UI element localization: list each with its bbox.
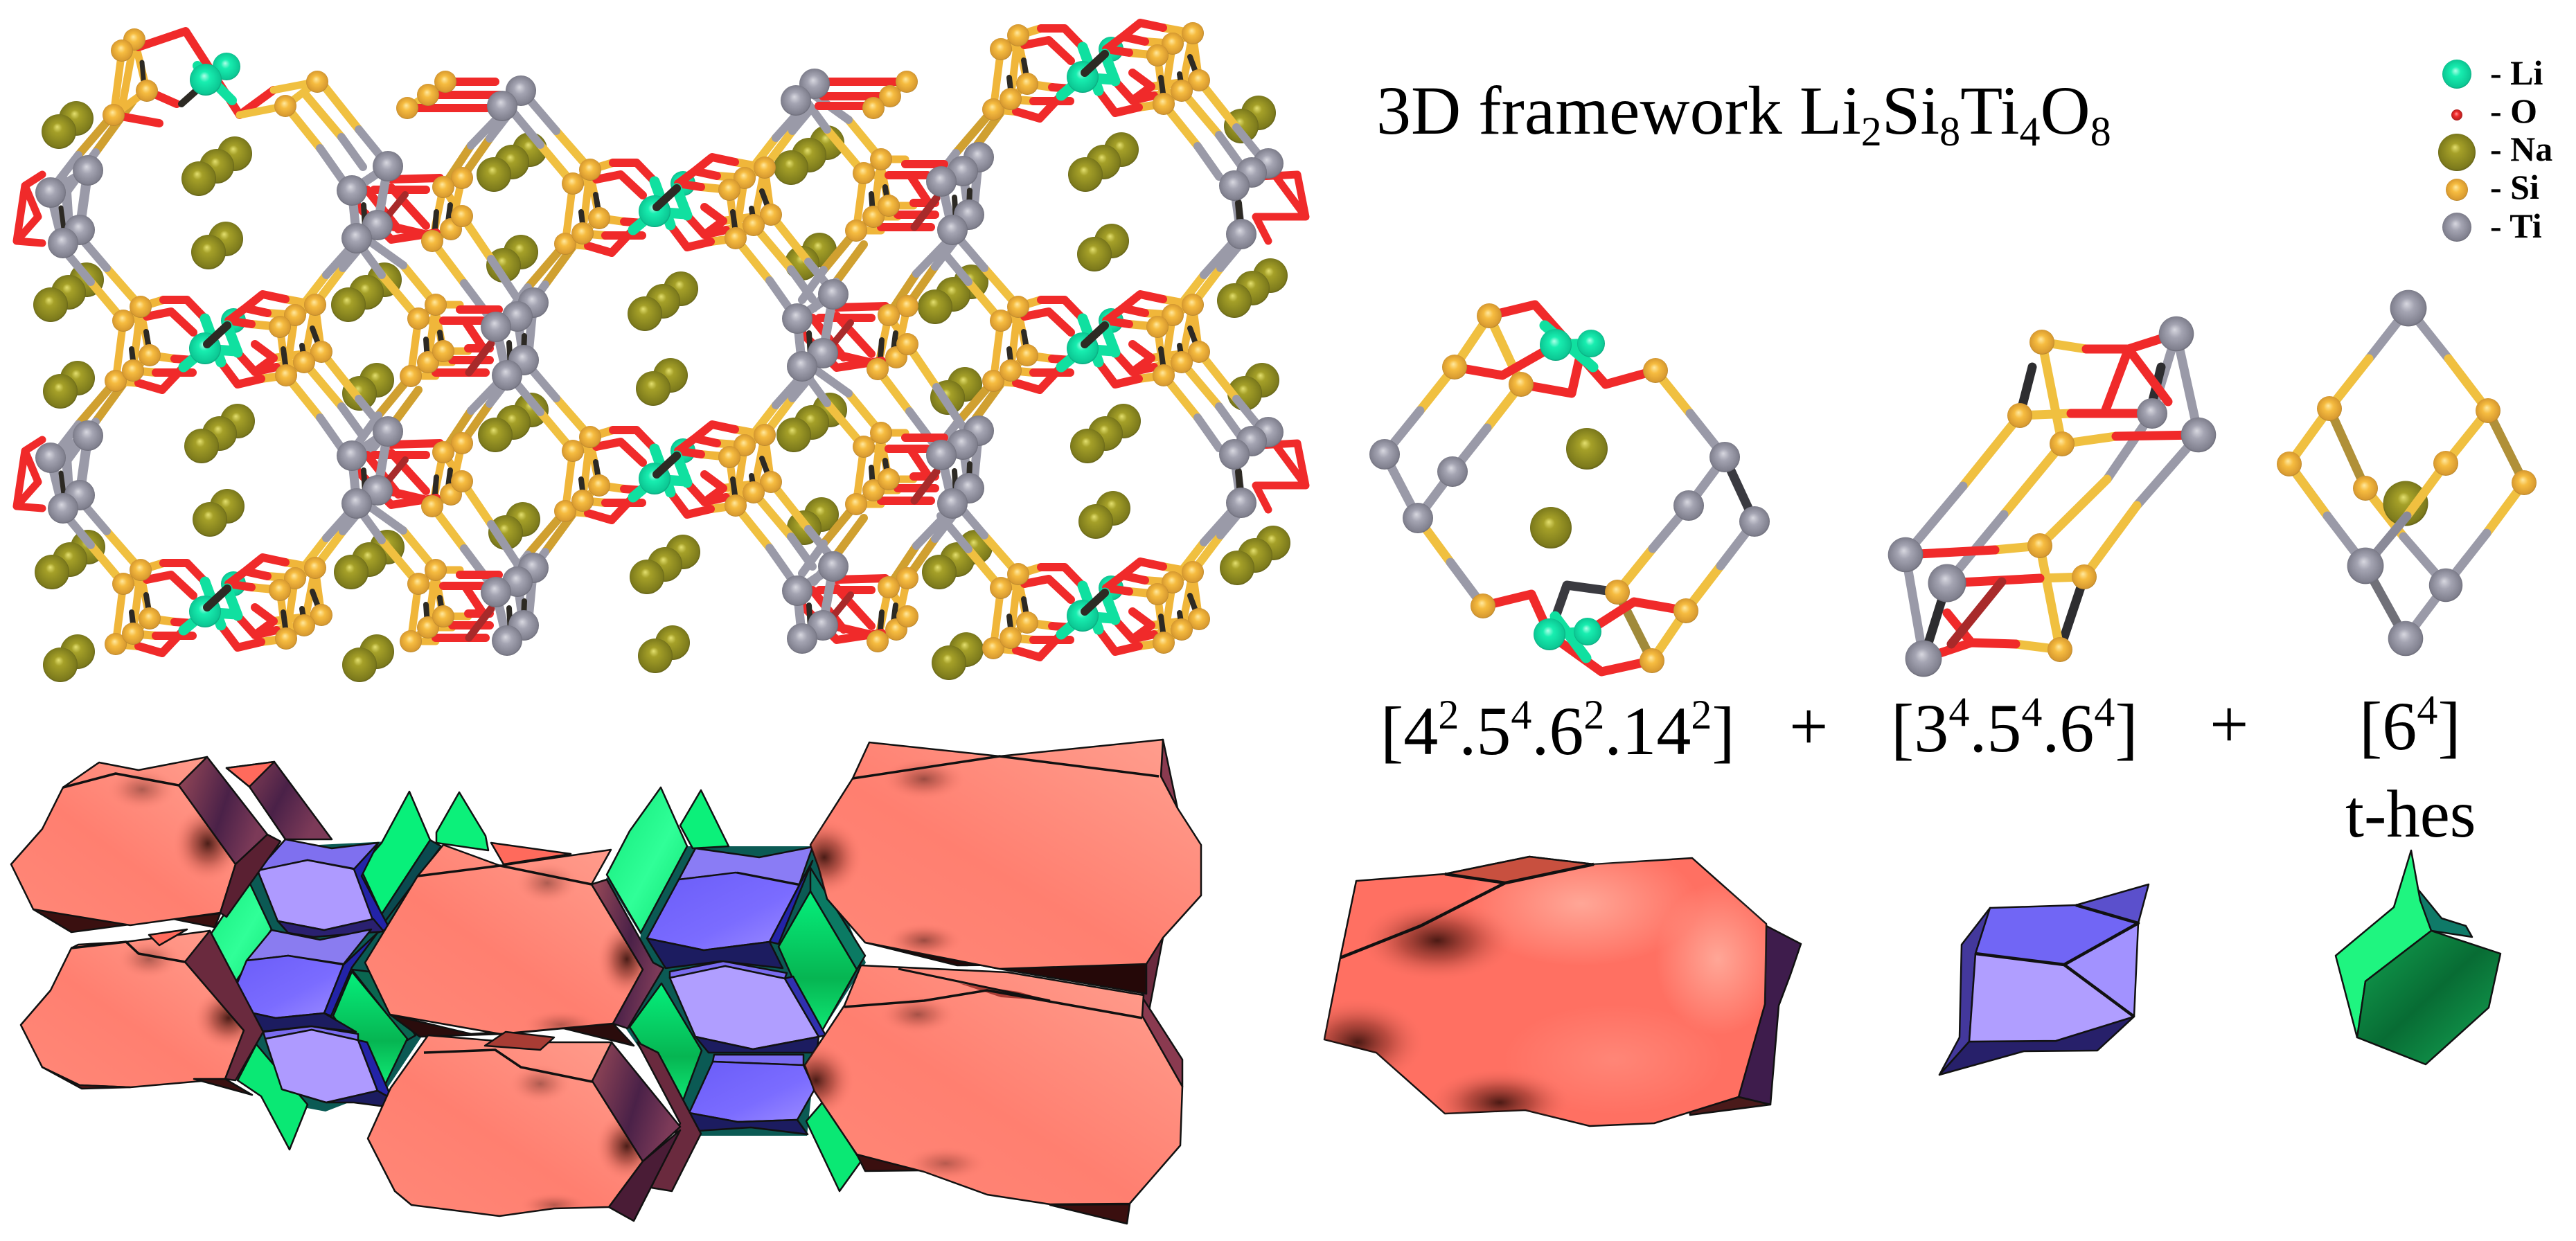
- formula label 1: 2: [1438, 692, 1459, 738]
- red cage upper right: [809, 738, 1202, 1008]
- formula label 1: ]: [1712, 693, 1735, 769]
- formula label 2: 4: [2094, 689, 2115, 735]
- plus sign 2: +: [2210, 686, 2248, 762]
- net label t-hes: t-hes: [2345, 777, 2476, 851]
- legend item: Na: [2438, 130, 2552, 171]
- top partial titanium nodes: [396, 69, 918, 121]
- polyhedron: blue [3^4.5^4.6^4]: [1939, 884, 2149, 1075]
- red cage lower centre: [368, 1032, 701, 1221]
- formula label 1: .6: [1531, 693, 1583, 769]
- title: Si: [1882, 72, 1939, 149]
- legend item: Si: [2446, 168, 2539, 206]
- panel: crystal framework ball-and-stick structure: [17, 22, 1306, 682]
- formula label 1: 4: [1511, 692, 1531, 738]
- plus sign 1: +: [1789, 688, 1828, 765]
- formula label 1: 2: [1583, 692, 1604, 738]
- formula label 3: ]: [2437, 688, 2461, 765]
- formula label 2: 4: [2021, 689, 2042, 735]
- title: Ti: [1960, 72, 2020, 149]
- sodium atoms: [33, 96, 1290, 682]
- formula label 2: ]: [2115, 690, 2138, 767]
- title: 8: [2090, 109, 2111, 154]
- formula label 3: [6: [2359, 688, 2417, 765]
- polyhedron: green [6^4] t-hes: [2336, 850, 2501, 1064]
- legend item: Ti: - Ti: [2490, 206, 2542, 245]
- cage 3: ball-and-stick [6^4]: [2277, 290, 2537, 656]
- red cage lower right: [778, 965, 1182, 1224]
- legend: [2438, 53, 2552, 245]
- legend item: Li: - Li: [2490, 53, 2543, 92]
- green tiles: [196, 787, 865, 1191]
- formula label 2: [3: [1891, 690, 1948, 767]
- formula label 3: 4: [2417, 687, 2437, 733]
- formula label 2: 4: [1948, 689, 1969, 735]
- formula label 1: .14: [1604, 693, 1691, 769]
- backing between tiles: [196, 841, 866, 1136]
- legend item: O: [2451, 91, 2537, 130]
- legend item: Si: - Si: [2490, 168, 2539, 206]
- titanium nodes: [17, 142, 1306, 656]
- formula label 1: .5: [1459, 693, 1511, 769]
- formula label 1: 2: [1691, 692, 1712, 738]
- title: O: [2041, 72, 2090, 149]
- legend item: Na: - Na: [2490, 130, 2552, 168]
- formula label 2: .5: [1969, 690, 2021, 767]
- title: 4: [2020, 109, 2041, 154]
- title: 2: [1861, 109, 1882, 154]
- cage 1: ball-and-stick [4^2.5^4.6^2.14^2]: [1369, 303, 1770, 673]
- red cage upper left: [11, 757, 332, 932]
- title: 8: [1939, 109, 1960, 154]
- formula label 2: .6: [2042, 690, 2094, 767]
- partial lithium node at top left: [103, 28, 328, 126]
- legend item: Ti: [2442, 206, 2542, 245]
- red cage lower left: [21, 929, 263, 1095]
- formula label 1: [4: [1380, 693, 1438, 769]
- lithium silicate nodes: [105, 22, 1210, 659]
- title: 3D framework Li: [1376, 72, 1861, 149]
- blue tiles: [227, 839, 826, 1134]
- panel: packed tiling of polyhedra: [11, 740, 1201, 1224]
- legend item: Li: [2442, 53, 2543, 92]
- legend item: O: - O: [2490, 91, 2537, 130]
- red cage centre: [365, 843, 664, 1046]
- polyhedron: red [4^2.5^4.6^2.14^2]: [1323, 856, 1802, 1127]
- framework bonds: [55, 80, 1261, 590]
- cage 2: ball-and-stick [3^4.5^4.6^4]: [1888, 316, 2216, 677]
